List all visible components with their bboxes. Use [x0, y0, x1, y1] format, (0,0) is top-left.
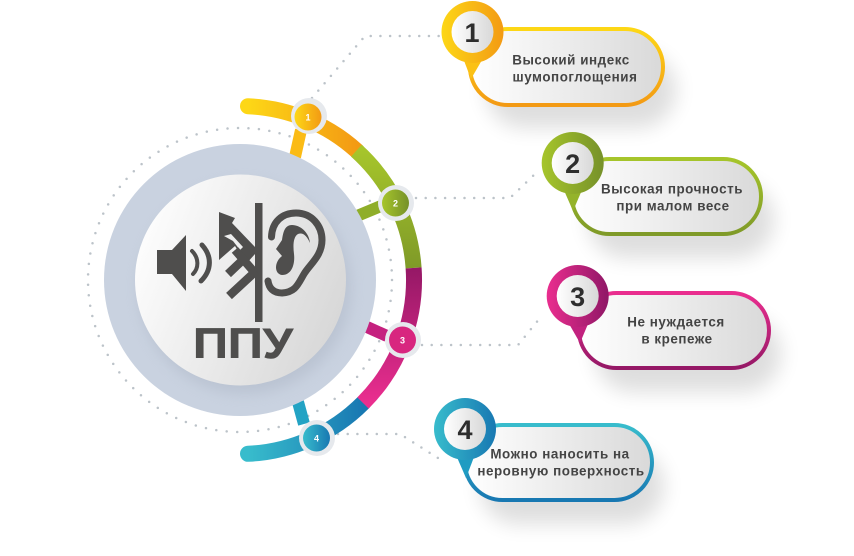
- card 1: [442, 1, 676, 128]
- progress arc: [248, 106, 414, 454]
- dotted ring: [88, 128, 392, 432]
- stem connectors: [295, 130, 387, 424]
- marker 2: 2: [393, 198, 398, 208]
- marker 4: [299, 420, 335, 456]
- card 3: [547, 265, 781, 392]
- icon: sound barrier: [219, 203, 262, 322]
- marker 3: [385, 322, 421, 358]
- marker 1: 1: [305, 112, 311, 122]
- icon: ear: [268, 213, 322, 293]
- pin 2: [542, 132, 604, 211]
- card 4: [434, 398, 664, 524]
- marker 1: [291, 98, 327, 134]
- card 2: [542, 132, 774, 258]
- marker 2: [378, 185, 414, 221]
- text 1: шумопоглощения: [513, 70, 637, 84]
- text 1: Высокий индекс: [512, 52, 630, 68]
- text 2: Высокая прочность: [601, 182, 743, 196]
- label: ППУ: ППУ: [193, 320, 294, 368]
- icon: speaker: [157, 235, 209, 291]
- text 2: при малом весе: [616, 198, 730, 214]
- marker 4: 4: [314, 434, 319, 444]
- pin 3: [547, 265, 609, 343]
- text 4: неровную поверхность: [477, 464, 645, 478]
- marker 3: 3: [400, 336, 405, 346]
- text 3: Не нуждается: [627, 314, 725, 330]
- pin 3: 3: [570, 282, 585, 312]
- central disc: [104, 144, 376, 416]
- dotted connectors: [312, 36, 540, 458]
- pin 1: 1: [464, 18, 480, 48]
- text 3: в крепеже: [641, 332, 713, 346]
- pin 4: 4: [457, 415, 473, 445]
- pin 1: [442, 1, 504, 79]
- pin 2: 2: [565, 149, 580, 179]
- text 4: Можно наносить на: [490, 446, 630, 462]
- pin 4: [434, 398, 496, 478]
